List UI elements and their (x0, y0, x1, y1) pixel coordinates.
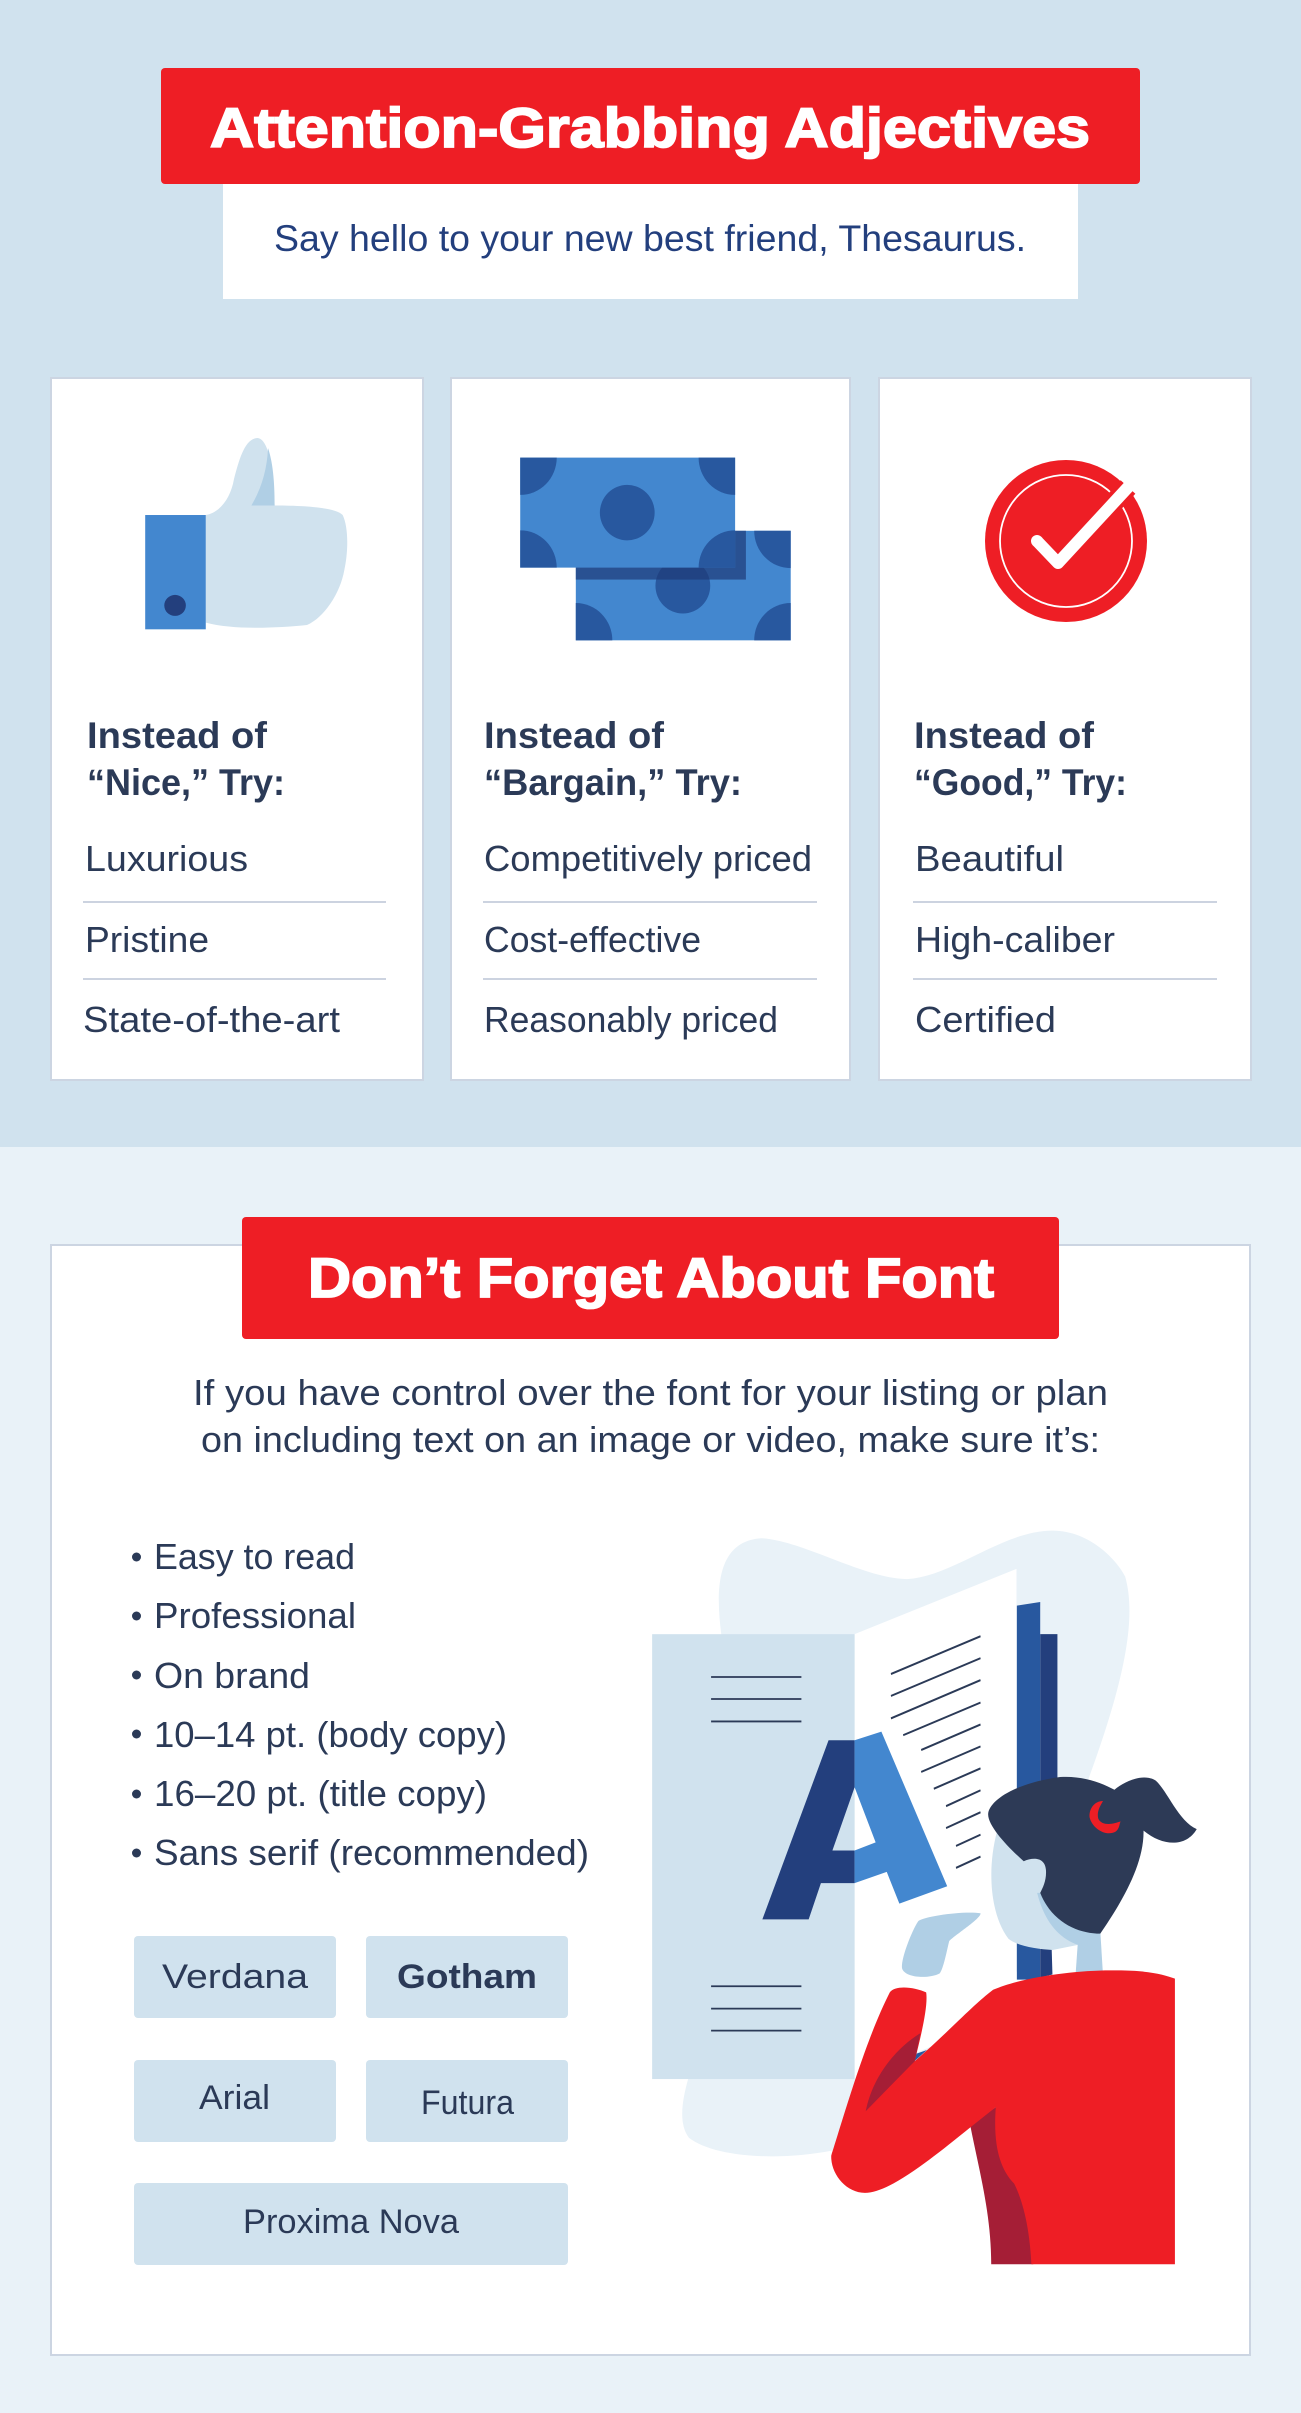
font chips: Arial (199, 2079, 270, 2117)
page lines (711, 1636, 981, 2031)
heading: nice: Instead of (87, 715, 268, 756)
icon: money bills (520, 458, 791, 640)
bullet list: Professional (154, 1595, 356, 1636)
font heading banner: Don’t Forget About Font (308, 1246, 994, 1309)
panel: good card (879, 378, 1251, 1080)
font heading banner (242, 1217, 1059, 1339)
panel: bottom background (0, 1147, 1301, 2413)
heading: bargain: “Bargain,” Try: (484, 762, 742, 803)
bullet list: 16–20 pt. (title copy) (154, 1773, 487, 1814)
blue book edge (913, 2050, 927, 2062)
font chips: Verdana (162, 1958, 308, 1996)
title banner: Attention-Grabbing Adjectives (210, 96, 1090, 159)
left page (652, 1634, 855, 2079)
panel: top background (0, 0, 1301, 1147)
heading: good: “Good,” Try: (914, 762, 1127, 803)
icon: thumbs up (145, 438, 347, 629)
list: bargain alternatives: Cost-effective (484, 919, 701, 960)
intro text: If you have control over the font for your listing or plan (193, 1372, 1108, 1413)
subtitle box (223, 184, 1078, 299)
illustration: woman reading book (652, 1531, 1197, 2264)
panel: bargain card (451, 378, 850, 1080)
list: nice alternatives: Luxurious (85, 838, 248, 879)
panel: nice card (51, 378, 423, 1080)
list: nice alternatives: State-of-the-art (83, 999, 340, 1040)
arm shadow (866, 2033, 920, 2111)
bullet list: 10–14 pt. (body copy) (154, 1714, 507, 1755)
list: bargain alternatives: Reasonably priced (484, 999, 778, 1040)
heading: good (914, 715, 1127, 803)
heading: nice: “Nice,” Try: (87, 762, 285, 803)
list: nice alternatives (83, 838, 386, 1040)
letter A (762, 1732, 947, 1919)
intro text (193, 1372, 1108, 1460)
bullet list: Easy to read (154, 1536, 355, 1577)
font chips: Gotham (397, 1958, 537, 1996)
sweater (831, 1970, 1175, 2264)
intro text: on including text on an image or video, make sure it’s: (201, 1419, 1100, 1460)
neck (1075, 1931, 1103, 1977)
book spine (1017, 1602, 1057, 1980)
list: good alternatives: Certified (915, 999, 1056, 1040)
bullet list: On brand (154, 1655, 310, 1696)
list: nice alternatives: Pristine (85, 919, 209, 960)
list: good alternatives (913, 838, 1217, 1040)
heading: bargain: Instead of (484, 715, 665, 756)
background blob (682, 1531, 1129, 2156)
heading: good: Instead of (914, 715, 1095, 756)
list: bargain alternatives: Competitively priced (484, 838, 812, 879)
hair (988, 1777, 1197, 1934)
subtitle box: Say hello to your new best friend, Thesaurus. (274, 218, 1026, 259)
font chips: Futura (421, 2084, 514, 2122)
title banner (161, 68, 1140, 184)
list: good alternatives: Beautiful (915, 838, 1064, 879)
bullet list: Sans serif (recommended) (154, 1832, 589, 1873)
heading: nice (87, 715, 285, 803)
font chips: Proxima Nova (243, 2203, 459, 2241)
heading: bargain (484, 715, 742, 803)
neck shadow (1037, 1893, 1100, 1945)
right page (855, 1569, 1016, 2079)
face (991, 1832, 1078, 1950)
list: good alternatives: High-caliber (915, 919, 1115, 960)
icon: red check badge (985, 460, 1147, 622)
list: bargain alternatives (483, 838, 817, 1040)
panel: font section (51, 1245, 1250, 2355)
bullet list (132, 1536, 589, 1873)
sweater shadow (970, 2107, 1033, 2264)
hand (902, 1913, 981, 1977)
font chips (134, 1936, 568, 2265)
scrunchie (1090, 1801, 1121, 1833)
